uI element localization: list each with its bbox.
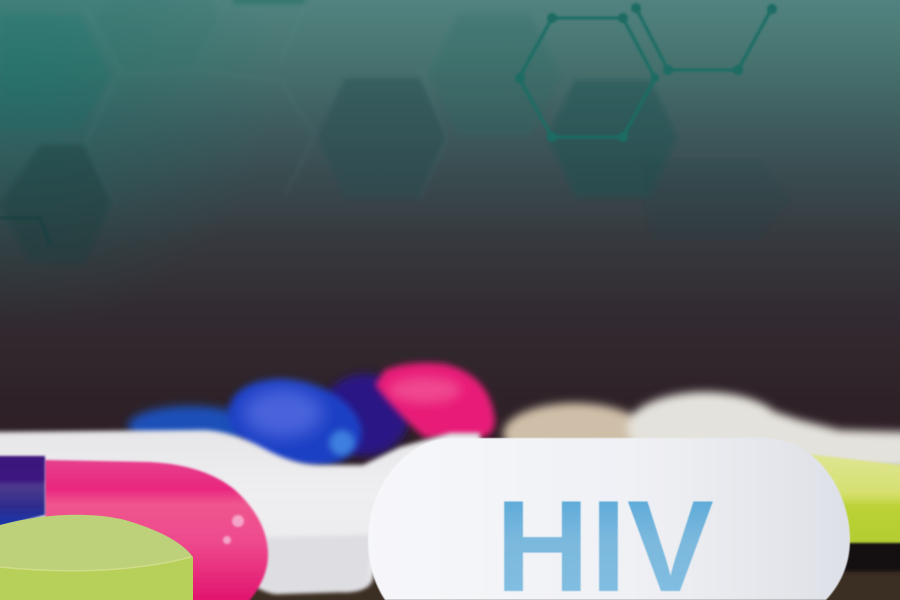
hexagon pattern xyxy=(0,0,790,262)
blurred pill: pink xyxy=(375,363,495,438)
blurred pill: blue capsule xyxy=(224,374,366,468)
molecule nodes xyxy=(515,3,777,142)
capsule highlight xyxy=(223,515,244,544)
blurred pill: purple xyxy=(321,374,409,456)
pink and purple capsule xyxy=(0,456,268,600)
capsule cap xyxy=(0,456,45,528)
background gradient xyxy=(0,0,900,340)
molecule outline xyxy=(0,8,772,245)
blurred pill: white stack right xyxy=(627,392,900,470)
blurred pill: far blue xyxy=(128,406,252,446)
blurred pill: beige xyxy=(496,396,638,439)
capsule body xyxy=(45,460,268,600)
blurred pill: lime xyxy=(810,453,900,545)
light hexagon edges xyxy=(85,5,447,205)
green round tablet xyxy=(0,515,193,600)
floor shadow xyxy=(250,542,900,600)
white round tablet behind capsule xyxy=(0,430,480,593)
main white pill xyxy=(368,438,850,600)
